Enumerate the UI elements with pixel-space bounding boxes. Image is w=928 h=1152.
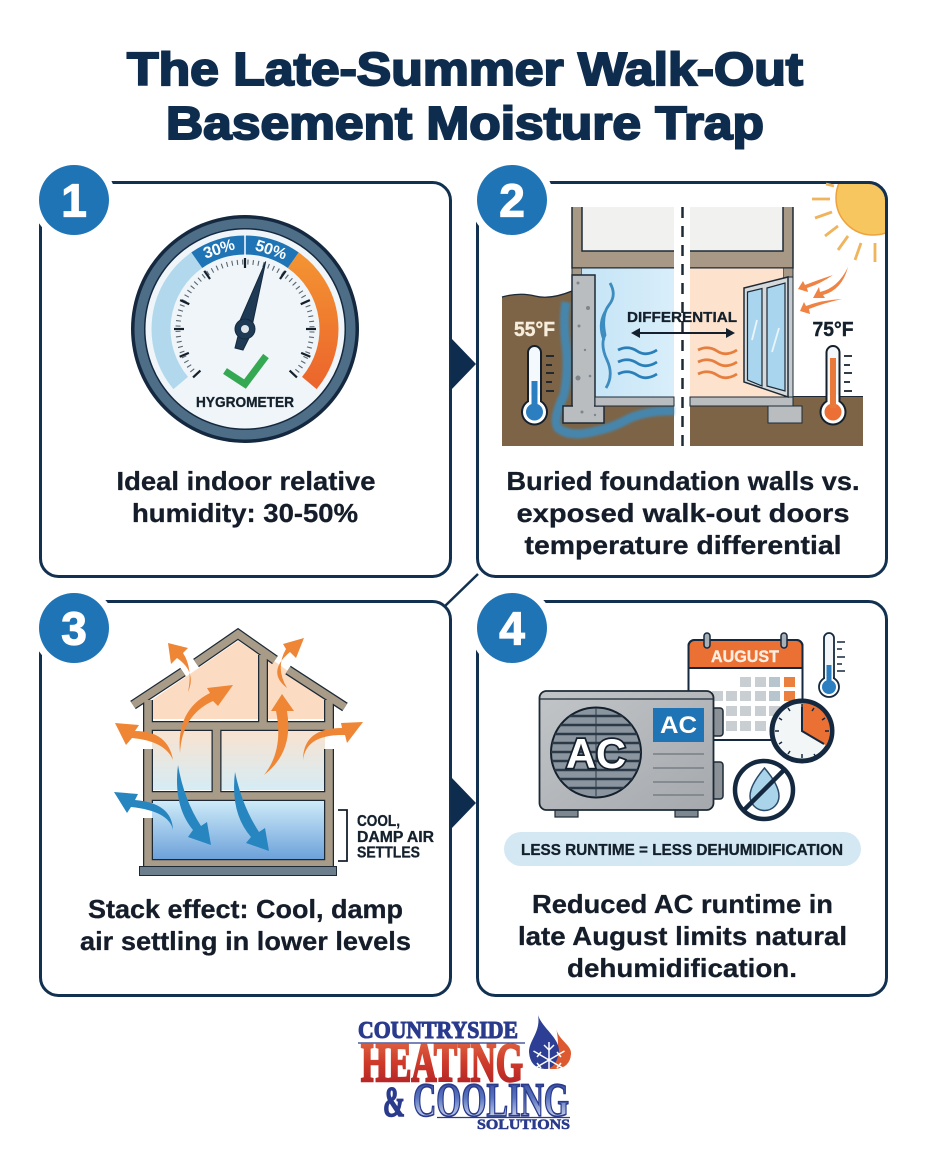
AC feet — [555, 809, 698, 817]
text: step 1 caption: Ideal indoor relative — [116, 466, 376, 496]
AC blue badge — [653, 708, 704, 742]
callout pill — [504, 832, 861, 866]
walk-out door — [744, 277, 793, 397]
logo solutions: SOLUTIONS — [477, 1117, 570, 1133]
ground outline — [502, 291, 572, 297]
interior cool side — [582, 268, 674, 397]
logo wordmark top: COUNTRYSIDE — [358, 1018, 518, 1044]
text: step 1 caption: humidity: 30-50% — [132, 498, 358, 528]
text: step 4 caption: dehumidification. — [567, 953, 797, 983]
logo: Countryside Heating & Cooling Solutions — [358, 1015, 571, 1133]
arrows: cool air sinking — [114, 765, 269, 851]
text: step 4 caption: Reduced AC runtime in — [532, 889, 833, 919]
AC outdoor unit — [540, 691, 714, 810]
arrows: solar heat — [798, 267, 848, 314]
icon: sun — [835, 184, 885, 236]
gauge minor ticks — [178, 262, 312, 375]
AC fan label: AC — [566, 730, 626, 777]
vapor squiggles — [603, 283, 613, 388]
panel corner over sun — [830, 182, 886, 240]
chart: hygrometer gauge — [131, 215, 359, 443]
logo snowflake — [534, 1042, 564, 1078]
label 75°F: 75°F — [812, 319, 854, 341]
text: step 3 caption: air settling in lower levels — [80, 926, 411, 956]
title: The Late-Summer Walk-Out — [127, 43, 803, 95]
house interior fills — [152, 641, 325, 861]
callout pill: LESS RUNTIME = LESS DEHUMIDIFICATION — [521, 842, 843, 859]
badge 4 — [470, 586, 554, 670]
text: step 2 caption: temperature differential — [524, 530, 842, 560]
badge 1 — [32, 158, 116, 242]
cool air waves — [618, 348, 657, 378]
label: cool damp air settles — [357, 813, 434, 862]
text: step 3 caption: Stack effect: Cool, damp — [88, 894, 403, 924]
arrow: differential double arrow — [631, 328, 735, 338]
icon: thermometer — [819, 633, 845, 697]
groundwater seepage — [556, 302, 674, 434]
arrow: step 3 to step 4 — [451, 777, 476, 829]
upper rooms and framing — [572, 207, 793, 278]
concrete wall and footing — [563, 275, 604, 423]
text: step 2 caption: exposed walk-out doors — [516, 498, 850, 528]
label: cool damp air settles: DAMP AIR — [357, 829, 434, 846]
connector line between panels — [445, 574, 478, 606]
badge 2 — [470, 158, 554, 242]
text: step 2 caption: Buried foundation walls vs. — [506, 466, 860, 496]
icon: August calendar: AUGUST — [711, 647, 780, 666]
icon: clock — [772, 701, 832, 761]
logo ampersand: & — [383, 1080, 405, 1126]
badge 4: 4 — [499, 602, 525, 654]
panel: step 2 card — [478, 182, 886, 576]
icon: warm thermometer — [820, 346, 852, 424]
text: step 2 caption — [506, 466, 860, 560]
centre dashed divider — [681, 207, 684, 446]
diagram: foundation vs walk-out door temperature differential — [502, 181, 888, 446]
sun rays — [812, 184, 875, 262]
house frame — [133, 634, 345, 866]
badge 2: 2 — [499, 174, 525, 226]
interior warm side — [690, 268, 783, 397]
icon: August calendar — [688, 633, 802, 740]
icon: no moisture — [735, 761, 793, 819]
bracket — [338, 810, 347, 861]
text: step 4 caption — [518, 889, 847, 983]
badge 1: 1 — [61, 174, 87, 226]
diagram: stack effect house — [114, 634, 434, 876]
panel: step 1 card — [40, 182, 450, 576]
arrows: warm air rising — [115, 638, 363, 775]
label: cool damp air settles: SETTLES — [357, 844, 420, 862]
ground right — [690, 397, 863, 446]
AC side bumps — [712, 708, 723, 799]
panel: step 3 card — [40, 602, 450, 996]
fan grille — [550, 708, 642, 798]
diagram: AC unit, calendar, clock, no-moisture — [504, 633, 861, 866]
gauge label: HYGROMETER — [196, 395, 294, 411]
gauge label 30%: 30% — [201, 236, 237, 263]
icon: green check mark — [225, 356, 266, 384]
label: cool damp air settles: COOL, — [357, 813, 400, 830]
foundation slab — [140, 866, 336, 876]
gauge major ticks — [174, 258, 316, 377]
gauge band: low humidity — [161, 260, 197, 383]
text: step 3 caption — [80, 894, 411, 956]
text: step 4 caption: late August limits natural — [518, 921, 847, 951]
badge 3 — [32, 586, 116, 670]
warm air waves — [698, 348, 737, 378]
gauge band: high humidity — [293, 260, 329, 383]
differential label: DIFFERENTIAL — [627, 309, 737, 326]
title: Basement Moisture Trap — [166, 97, 764, 149]
logo wordmark cooling: COOLING — [413, 1074, 569, 1127]
ground left — [502, 291, 674, 446]
gauge label 50%: 50% — [253, 237, 289, 264]
logo flame and snowflake — [529, 1015, 571, 1078]
logo wordmark heating: HEATING — [361, 1032, 523, 1093]
title — [127, 43, 803, 149]
arrow: step 1 to step 2 — [451, 338, 476, 390]
gauge needle — [235, 262, 266, 350]
badge 3: 3 — [61, 602, 87, 654]
panel: step 4 card — [478, 602, 886, 996]
icon: cold thermometer — [522, 346, 554, 424]
label 55°F: 55°F — [514, 319, 555, 341]
AC blue badge: AC — [660, 712, 697, 739]
gauge band: ideal range — [197, 245, 293, 260]
AC vent lines — [653, 754, 704, 795]
text: step 1 caption — [116, 466, 376, 528]
floor slab — [595, 397, 802, 423]
